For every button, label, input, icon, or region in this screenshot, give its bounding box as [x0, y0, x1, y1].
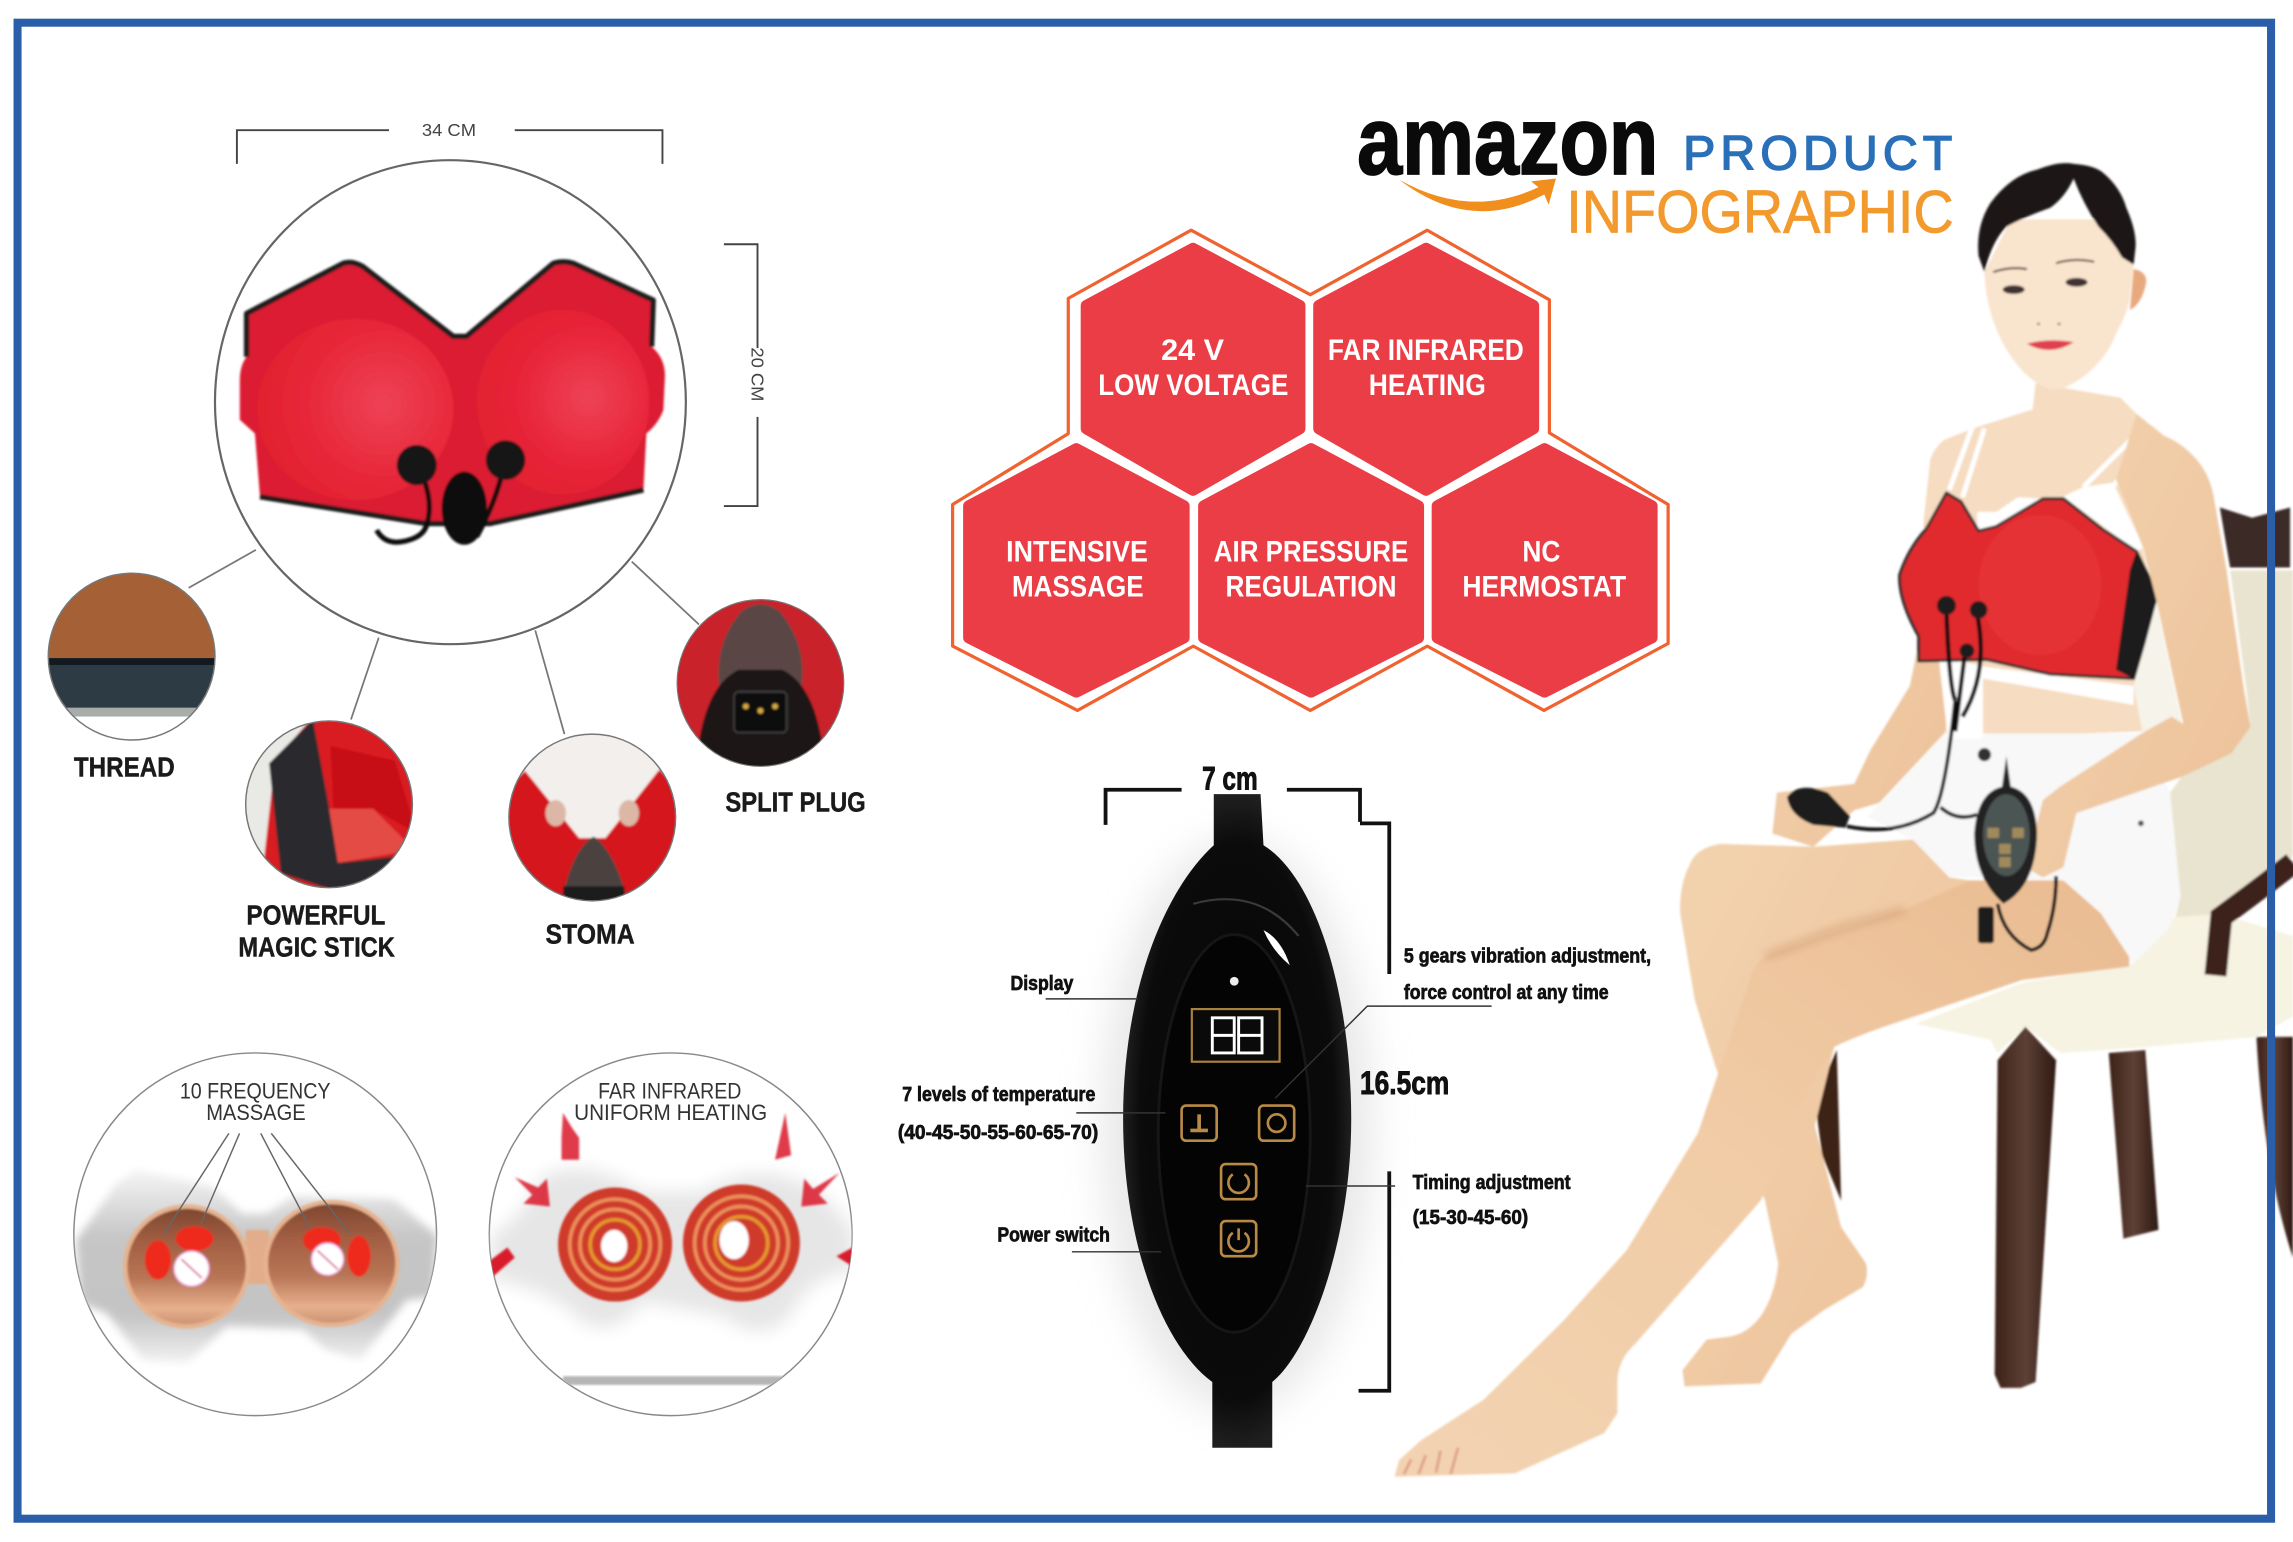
hex: far infrared heating: HEATING: [1369, 369, 1486, 402]
hex: NC hermostat: HERMOSTAT: [1462, 571, 1626, 604]
hex: air pressure regulation: REGULATION: [1225, 571, 1397, 604]
hex: air pressure regulation: AIR PRESSURE: [1214, 536, 1408, 569]
label: POWERFUL: [246, 899, 385, 930]
callout: vibration: 5 gears vibration adjustment,: [1404, 944, 1651, 967]
dimension: height 20 CM: [724, 244, 768, 506]
hex: NC hermostat: [1438, 449, 1652, 692]
callout: timing: Timing adjustment: [1413, 1171, 1571, 1194]
hex: far infrared heating: FAR INFRARED: [1328, 334, 1524, 367]
panel: remote controller: [898, 761, 1651, 1448]
front leg: [1395, 880, 2129, 1477]
panel: 10 frequency massage: [74, 1053, 437, 1416]
hex: 24 V low voltage: 24 V: [1161, 334, 1224, 367]
handheld remote: [1974, 756, 2056, 950]
button: timer: [1221, 1164, 1256, 1199]
button: temperature: [1182, 1106, 1217, 1141]
controller body: [1123, 794, 1351, 1448]
worn massager: [1900, 493, 2157, 731]
callout lines: [1046, 999, 1492, 1252]
wordmark: amazon: [1357, 88, 1658, 195]
callout: temperature: [898, 1083, 1098, 1144]
product word: PRODUCT: [1683, 127, 1952, 181]
inner face: [1158, 934, 1310, 1332]
leg crease shadow: [1765, 910, 1904, 956]
detail: split plug: [673, 597, 866, 818]
main product circle: [215, 160, 686, 644]
callout: temperature: (40-45-50-55-60-65-70): [898, 1121, 1098, 1144]
grey product shadow: [76, 1170, 437, 1363]
highlight: [1263, 930, 1290, 965]
indicator dot: [1230, 977, 1239, 986]
dimension: height 20 CM: 20 CM: [748, 347, 768, 401]
pointer lines: [164, 1133, 349, 1234]
height label: 16.5cm: [1360, 1065, 1449, 1101]
shorts: [1867, 733, 2180, 964]
panel: far infrared uniform heating: [489, 1053, 853, 1416]
heading line 2: UNIFORM HEATING: [574, 1100, 767, 1125]
heat arrows: [490, 1113, 853, 1277]
button: power: [1221, 1221, 1256, 1256]
chair: [1815, 507, 2293, 1388]
copper cups: [125, 1202, 397, 1326]
detail: thread: [44, 570, 219, 783]
callout: vibration: force control at any time: [1404, 981, 1609, 1004]
callout: temperature: 7 levels of temperature: [902, 1083, 1095, 1106]
label: SPLIT PLUG: [725, 787, 866, 818]
callout: timing: (15-30-45-60): [1413, 1206, 1528, 1229]
infographic word: INFOGRAPHIC: [1566, 179, 1954, 246]
heated cups: [558, 1185, 800, 1302]
heading: 10 FREQUENCY: [180, 1078, 331, 1103]
dimension: width 34 CM: 34 CM: [422, 120, 476, 140]
display: [1192, 1009, 1280, 1062]
hex: 24 V low voltage: LOW VOLTAGE: [1098, 369, 1288, 402]
callout: display: Display: [1010, 972, 1074, 995]
detail: powerful magic stick: [238, 717, 417, 962]
hex: NC hermostat: NC: [1522, 536, 1560, 569]
label: STOMA: [545, 918, 635, 949]
heading line 2: MASSAGE: [206, 1100, 306, 1125]
connector lines: [189, 550, 699, 734]
grey product shadow: [491, 1169, 853, 1385]
width label: 7 cm: [1202, 761, 1258, 797]
controller soft shadow: [1103, 841, 1372, 1411]
photo: seated model with chair: [1395, 163, 2293, 1477]
right arm: [2025, 414, 2251, 877]
detail: stoma: [505, 731, 680, 949]
label: THREAD: [74, 752, 175, 783]
white top: [1939, 421, 2182, 739]
hex: air pressure regulation: [1204, 449, 1418, 692]
hex: intensive massage: MASSAGE: [1012, 571, 1144, 604]
hex: 24 V low voltage: [1087, 249, 1300, 490]
button: vibration: [1259, 1106, 1294, 1141]
callout: timing: [1413, 1171, 1571, 1229]
label line 2: MAGIC STICK: [238, 931, 395, 962]
callout: power switch: Power switch: [997, 1224, 1110, 1247]
heading: FAR INFRARED: [598, 1078, 741, 1103]
hex: intensive massage: [969, 449, 1184, 692]
head: [1978, 163, 2146, 390]
left arm: [1772, 459, 1949, 847]
panel: feature hexagons: [953, 230, 1668, 710]
icon: amazon smile: [1399, 178, 1556, 211]
dimension: width 34 CM: [237, 120, 662, 164]
toes: [1404, 1448, 1458, 1474]
back leg: [1680, 839, 1970, 1386]
product: red massager: [240, 262, 665, 545]
torso: [1920, 383, 2163, 739]
logo: amazon product infographic: [1357, 88, 1954, 246]
panel: product dimensions: [189, 120, 768, 734]
dimension brackets: [1106, 790, 1389, 1391]
air bulb and hose: [1787, 701, 2144, 829]
callout: vibration: [1404, 944, 1651, 1004]
hex: intensive massage: INTENSIVE: [1006, 536, 1148, 569]
hex: far infrared heating: [1319, 249, 1533, 490]
